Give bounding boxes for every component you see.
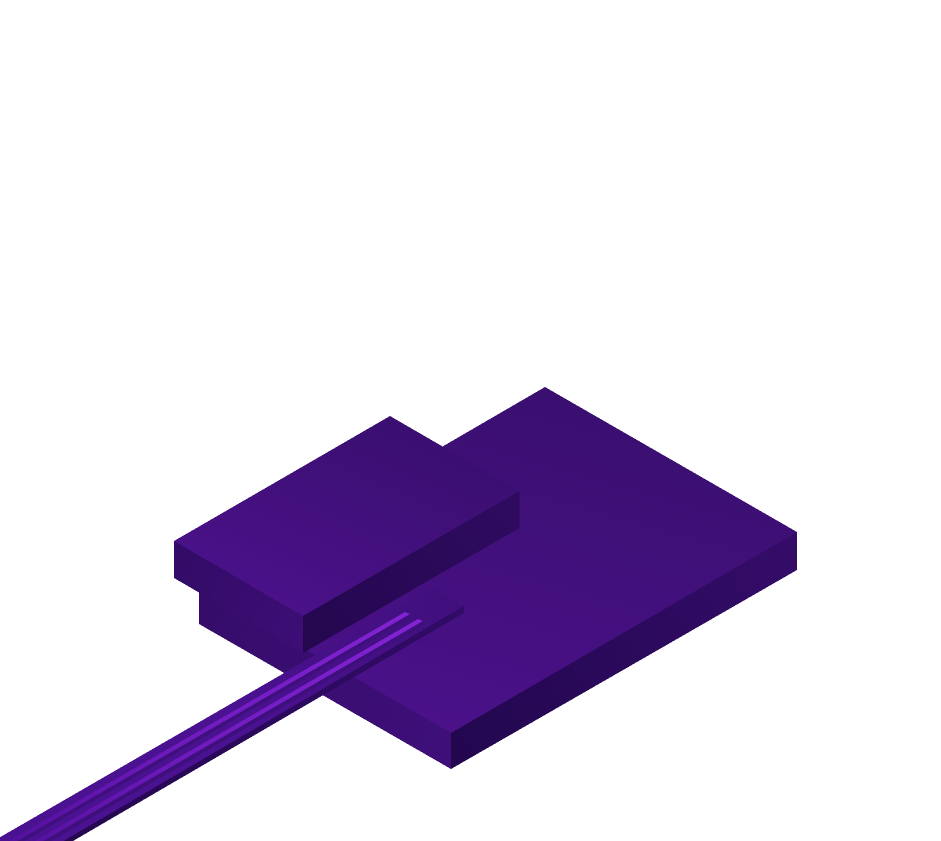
bright trace one — [0, 612, 410, 841]
large plate left face — [199, 588, 451, 769]
bright trace two — [0, 619, 423, 841]
large plate — [199, 387, 797, 769]
ribbon side face — [55, 606, 464, 841]
ribbon top face — [0, 587, 464, 841]
small plate right face — [303, 491, 520, 653]
groove shadow two — [0, 622, 425, 841]
groove shadow one — [0, 615, 412, 841]
ribbon connector — [0, 587, 464, 841]
small plate — [174, 416, 520, 653]
small plate left face — [174, 541, 303, 653]
small plate top face — [174, 416, 520, 616]
large plate top face — [199, 387, 797, 733]
large plate right face — [451, 532, 797, 769]
